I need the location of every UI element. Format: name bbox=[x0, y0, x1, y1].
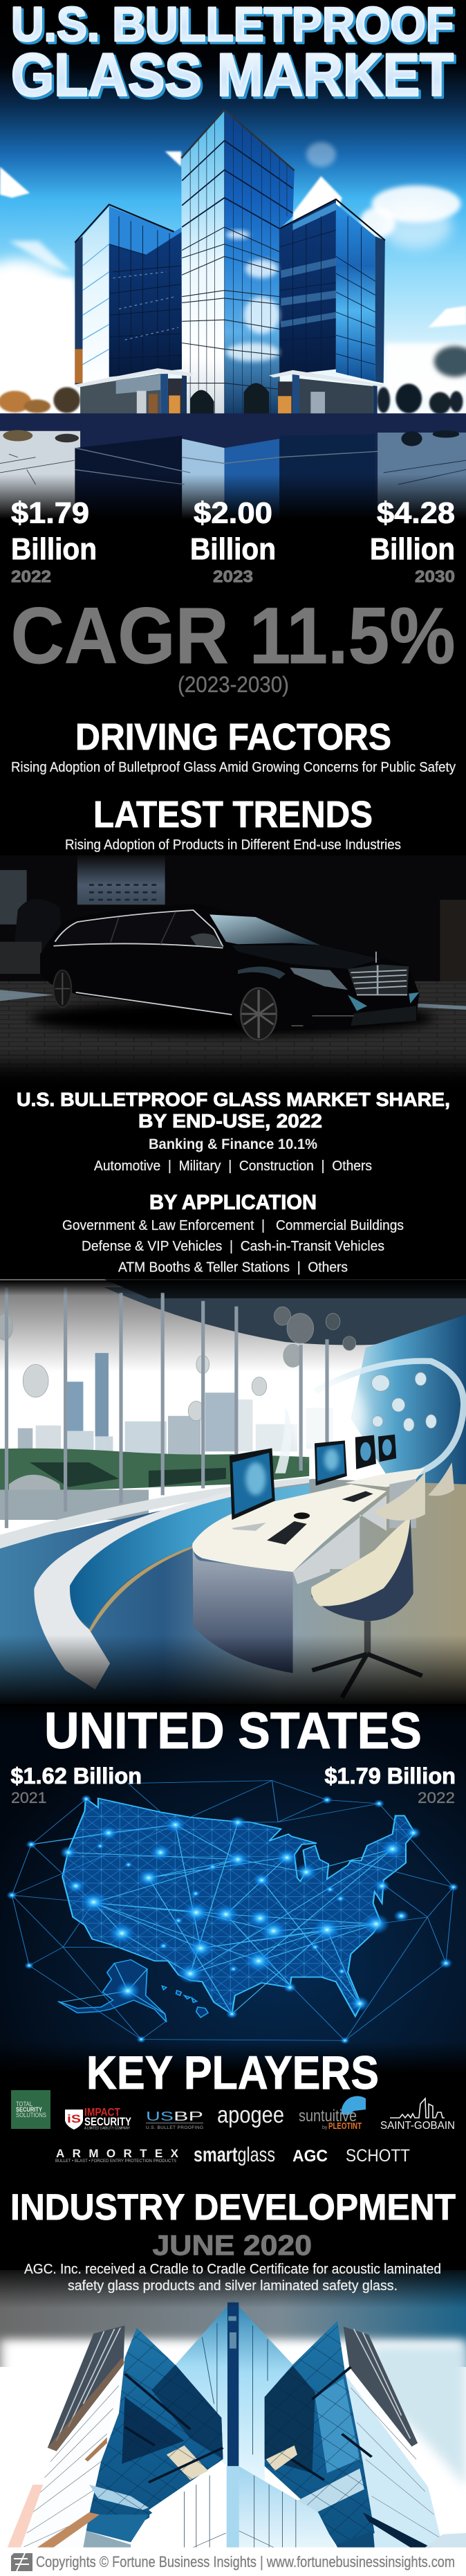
dark top of sky bbox=[0, 0, 466, 76]
ceiling bbox=[104, 1287, 466, 1345]
logo: Total Security Solutions bbox=[11, 2090, 50, 2129]
storm cloud right bbox=[434, 346, 466, 377]
right blue wing bbox=[265, 2321, 375, 2545]
logo: Suntuitive by Pleotint bbox=[299, 2096, 366, 2131]
fade development section into image bbox=[0, 2263, 466, 2308]
clouds bbox=[0, 142, 466, 420]
outer network lines bbox=[12, 1781, 454, 2040]
ground floor entrances bbox=[75, 368, 384, 417]
fade top of map bbox=[0, 1704, 466, 1725]
fade map to black at base bbox=[0, 2042, 466, 2073]
application segments bbox=[62, 1218, 404, 1275]
logo: Impact Security: IMPACT bbox=[84, 2107, 120, 2119]
US value 2022 bbox=[325, 1763, 456, 1806]
stat: 2030 value: Billion bbox=[370, 532, 455, 566]
map panel background bbox=[0, 1706, 466, 2073]
monitors bbox=[230, 1435, 396, 1545]
heading: driving factors: DRIVING FACTORS bbox=[75, 716, 391, 758]
development description bbox=[24, 2261, 441, 2294]
stat: 2023 value: Billion bbox=[190, 532, 276, 566]
hanging glass orbs bbox=[0, 1307, 436, 1431]
centre lower faces bbox=[149, 2466, 226, 2548]
central tower bbox=[181, 109, 295, 419]
logo: Armortex: ARMORTEX bbox=[56, 2147, 179, 2160]
pavement bbox=[0, 981, 466, 1087]
illustration: armoured limousine bbox=[0, 855, 466, 1087]
US value 2021: $1.62 Billion bbox=[11, 1763, 142, 1788]
logo: apogee: apogee bbox=[217, 2102, 284, 2128]
logo: USBP: BP bbox=[174, 2110, 203, 2123]
stat: 2023 value bbox=[190, 497, 276, 586]
heading: market share by end-use bbox=[17, 1089, 450, 1132]
title face bbox=[11, 0, 454, 109]
stat: 2022 value: Billion bbox=[11, 532, 97, 566]
logo: Suntuitive by Pleotint: suntuitive bbox=[299, 2107, 357, 2125]
CAGR period: (2023-2030) bbox=[178, 672, 289, 697]
heading: key players: KEY PLAYERS bbox=[86, 2047, 379, 2099]
bumper bbox=[351, 1006, 416, 1026]
logo: AGC: AGC bbox=[292, 2147, 328, 2166]
leading segment: Banking & Finance 10.1% bbox=[149, 1136, 317, 1152]
rear wheel bbox=[53, 970, 71, 1007]
US mainland with mesh bbox=[62, 1797, 416, 2018]
logo: Impact Security: SECURITY bbox=[84, 2115, 132, 2128]
car shadow bbox=[30, 1001, 434, 1035]
logo: Suntuitive by Pleotint: PLEOTINT bbox=[328, 2121, 362, 2131]
sky reflections on tower bbox=[226, 230, 279, 361]
stat: 2030 value bbox=[370, 497, 455, 586]
stat: 2030 value: 2030 bbox=[415, 568, 455, 586]
heading: market share by end-use: U.S. BULLETPROOF GLASS MARKET SHARE, bbox=[17, 1089, 450, 1110]
footer bbox=[0, 2548, 466, 2576]
night background bbox=[0, 855, 466, 1087]
illustration: futuristic office with skyline bbox=[0, 1279, 466, 1707]
logo: USBP: U.S. BULLET PROOFING bbox=[146, 2125, 203, 2130]
right top fin bbox=[344, 2327, 418, 2447]
grille bbox=[348, 965, 409, 995]
left blue wing bbox=[89, 2328, 223, 2528]
centre upper faces bbox=[176, 2300, 233, 2466]
stat: 2023 value: 2023 bbox=[213, 568, 253, 586]
chairs bbox=[311, 1462, 454, 1698]
headlight bbox=[290, 968, 348, 990]
hero illustration: glass office towers bbox=[0, 65, 466, 518]
end-use segments: Automotive | Military | Construction | Others bbox=[94, 1159, 372, 1174]
icon: Fortune Business Insights logo bbox=[11, 2553, 32, 2571]
central column bbox=[227, 2303, 239, 2466]
Alaska and Hawaii bbox=[58, 1960, 208, 2022]
blue wall with glass swirl bbox=[351, 1315, 466, 1485]
heading: market share by end-use: BY END-USE, 2022 bbox=[138, 1110, 322, 1132]
US value 2021 bbox=[11, 1763, 142, 1806]
inner network lines bbox=[31, 1822, 393, 2014]
desk bbox=[192, 1468, 425, 1673]
development date: JUNE 2020 bbox=[152, 2229, 312, 2261]
logo: Armortex: BULLET • BLAST • FORCED ENTRY PROTECTION PRODUCTS bbox=[55, 2159, 176, 2164]
white grid sides bbox=[24, 2369, 123, 2548]
glowing nodes bbox=[6, 1795, 458, 2044]
left top fin bbox=[48, 2325, 125, 2451]
logo: Total Security Solutions: SOLUTIONS bbox=[16, 2112, 46, 2119]
trees bbox=[0, 1449, 309, 1490]
title: U.S. Bulletproof Glass Market bbox=[11, 0, 456, 111]
wet pavement and reflection bbox=[0, 413, 466, 518]
logo: Total Security Solutions: TOTAL bbox=[16, 2101, 32, 2108]
window sky bbox=[0, 1279, 466, 1552]
heading: United States: UNITED STATES bbox=[44, 1702, 422, 1759]
development description: safety glass products and silver laminated safety glass. bbox=[68, 2278, 398, 2294]
heading: latest trends: LATEST TRENDS bbox=[93, 794, 373, 835]
fade below limousine bbox=[0, 1059, 466, 1090]
US value 2022: $1.79 Billion bbox=[325, 1763, 456, 1788]
glowing US network map bbox=[0, 1772, 466, 2049]
US value 2021: 2021 bbox=[11, 1789, 47, 1806]
logo: smartglass: smartglass bbox=[194, 2143, 275, 2166]
logo: Total Security Solutions: SECURITY bbox=[16, 2106, 43, 2114]
sky gradient bbox=[0, 2270, 466, 2548]
heading: by application: BY APPLICATION bbox=[149, 1191, 317, 1214]
window mullions bbox=[6, 1287, 327, 1528]
fade hero to black bbox=[0, 474, 466, 519]
sky bbox=[0, 65, 466, 414]
stat: 2030 value: $4.28 bbox=[377, 497, 455, 530]
stat: 2023 value: $2.00 bbox=[194, 497, 272, 530]
fade top of office bbox=[0, 1280, 466, 1296]
trees bbox=[0, 383, 463, 415]
development description: AGC. Inc. received a Cradle to Cradle Certificate for acoustic laminated bbox=[24, 2261, 441, 2277]
logo: USBP bbox=[146, 2110, 203, 2130]
title extrusion bbox=[13, 0, 456, 111]
US value 2022: 2022 bbox=[418, 1789, 455, 1806]
background buildings bbox=[77, 855, 165, 905]
base bands bbox=[363, 2512, 431, 2548]
logo: Impact Security: A LIMITED LIABILITY COMPANY bbox=[84, 2126, 131, 2130]
front wheel bbox=[241, 988, 277, 1040]
car body bbox=[40, 903, 419, 1040]
stat: 2022 value: 2022 bbox=[11, 568, 51, 586]
logo: Suntuitive by Pleotint: by bbox=[322, 2125, 328, 2130]
skyline bbox=[18, 1353, 333, 1457]
left building bbox=[75, 205, 182, 385]
fade bottom bbox=[0, 1635, 466, 1707]
logo: USBP: US bbox=[146, 2110, 174, 2123]
application segments: Defense & VIP Vehicles | Cash-in-Transit Vehicles bbox=[82, 1239, 384, 1254]
warm reflections bbox=[8, 2485, 43, 2548]
application segments: ATM Booths & Teller Stations | Others bbox=[118, 1260, 348, 1275]
logo: Saint-Gobain: SAINT-GOBAIN bbox=[380, 2120, 455, 2132]
illustration: glass skyscraper viewed from below bbox=[0, 2270, 466, 2548]
dark frame lines bbox=[125, 2367, 372, 2483]
latest trend text: Rising Adoption of Products in Different End-use Industries bbox=[65, 837, 401, 853]
logo: Saint-Gobain bbox=[380, 2098, 455, 2132]
logo: Impact Security bbox=[65, 2107, 132, 2130]
pool of water bbox=[70, 1485, 309, 1626]
stat: 2022 value bbox=[11, 497, 97, 586]
right building bbox=[279, 199, 385, 383]
logo: Impact Security: iS bbox=[67, 2112, 81, 2125]
logo: Schott: SCHOTT bbox=[346, 2146, 410, 2166]
stat: 2022 value: $1.79 bbox=[11, 497, 89, 530]
floor bbox=[0, 1479, 466, 1706]
application segments: Government & Law Enforcement | Commercial Buildings bbox=[62, 1218, 404, 1233]
